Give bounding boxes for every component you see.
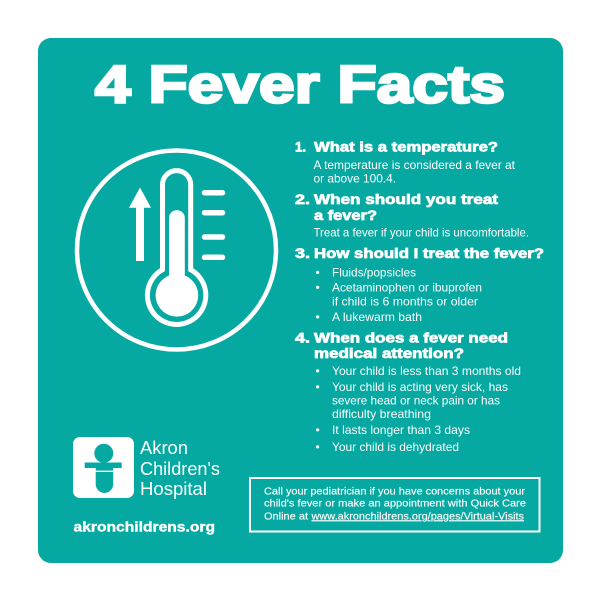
icon: thermometer in circle — [77, 150, 276, 350]
fact 1: or above 100.4. — [314, 172, 396, 186]
callout box: www.akronchildrens.org/pages/Virtual-Visits — [310, 510, 524, 522]
fact 2: When should you treat — [314, 192, 498, 207]
icon: hospital logo mark — [73, 437, 134, 498]
fact 4: It lasts longer than 3 days — [332, 423, 470, 437]
callout box: Call your pediatrician if you have concerns about your — [264, 485, 526, 497]
fact 4: Your child is dehydrated — [332, 440, 459, 454]
callout box: child's fever or make an appointment with Quick Care — [264, 498, 526, 510]
fact 3: A lukewarm bath — [332, 310, 422, 324]
fact 3: if child is 6 months or older — [332, 295, 478, 309]
logo wordmark: Hospital — [140, 478, 207, 499]
fact 3: 3. — [295, 246, 310, 261]
fact 4: • — [316, 380, 320, 394]
fact 4: 4. — [295, 330, 310, 345]
fact 3: Acetaminophen or ibuprofen — [332, 281, 482, 295]
fact 3: Fluids/popsicles — [332, 266, 416, 280]
fact 3: • — [316, 281, 320, 295]
fact 4: When does a fever need — [314, 330, 508, 345]
fact 4: severe head or neck pain or has — [332, 393, 500, 407]
callout box: Online at — [264, 510, 308, 522]
fact 3: • — [316, 310, 320, 324]
fact 4 — [295, 330, 521, 454]
fact 1: What is a temperature? — [314, 140, 498, 155]
fact 2 — [295, 192, 529, 240]
website url: akronchildrens.org — [74, 519, 215, 535]
fact 2: 2. — [295, 192, 310, 207]
fact 2: a fever? — [314, 208, 377, 223]
icon: up arrow — [129, 188, 151, 261]
fact 4: Your child is acting very sick, has — [332, 380, 508, 394]
panel: teal card — [38, 38, 563, 563]
fact 3 — [295, 246, 544, 324]
fact 4: medical attention? — [314, 346, 464, 361]
fact 4: difficulty breathing — [332, 407, 431, 421]
fact 1: 1. — [295, 140, 306, 155]
fact 3: How should I treat the fever? — [314, 246, 544, 261]
icon: thermometer — [147, 171, 206, 324]
icon: temperature ticks — [204, 193, 222, 257]
fact 1 — [295, 140, 516, 186]
fact 1: A temperature is considered a fever at — [314, 158, 516, 172]
fact 3: • — [316, 266, 320, 280]
callout box — [250, 478, 540, 532]
logo wordmark: Children's — [140, 458, 220, 479]
logo wordmark — [140, 437, 220, 499]
fact 4: • — [316, 440, 320, 454]
fact 2: Treat a fever if your child is uncomfortable. — [314, 226, 529, 240]
fact 4: • — [316, 423, 320, 437]
logo wordmark: Akron — [140, 437, 188, 458]
fact 4: Your child is less than 3 months old — [332, 364, 521, 378]
fact 4: • — [316, 364, 320, 378]
title: 4 Fever Facts — [95, 55, 505, 114]
